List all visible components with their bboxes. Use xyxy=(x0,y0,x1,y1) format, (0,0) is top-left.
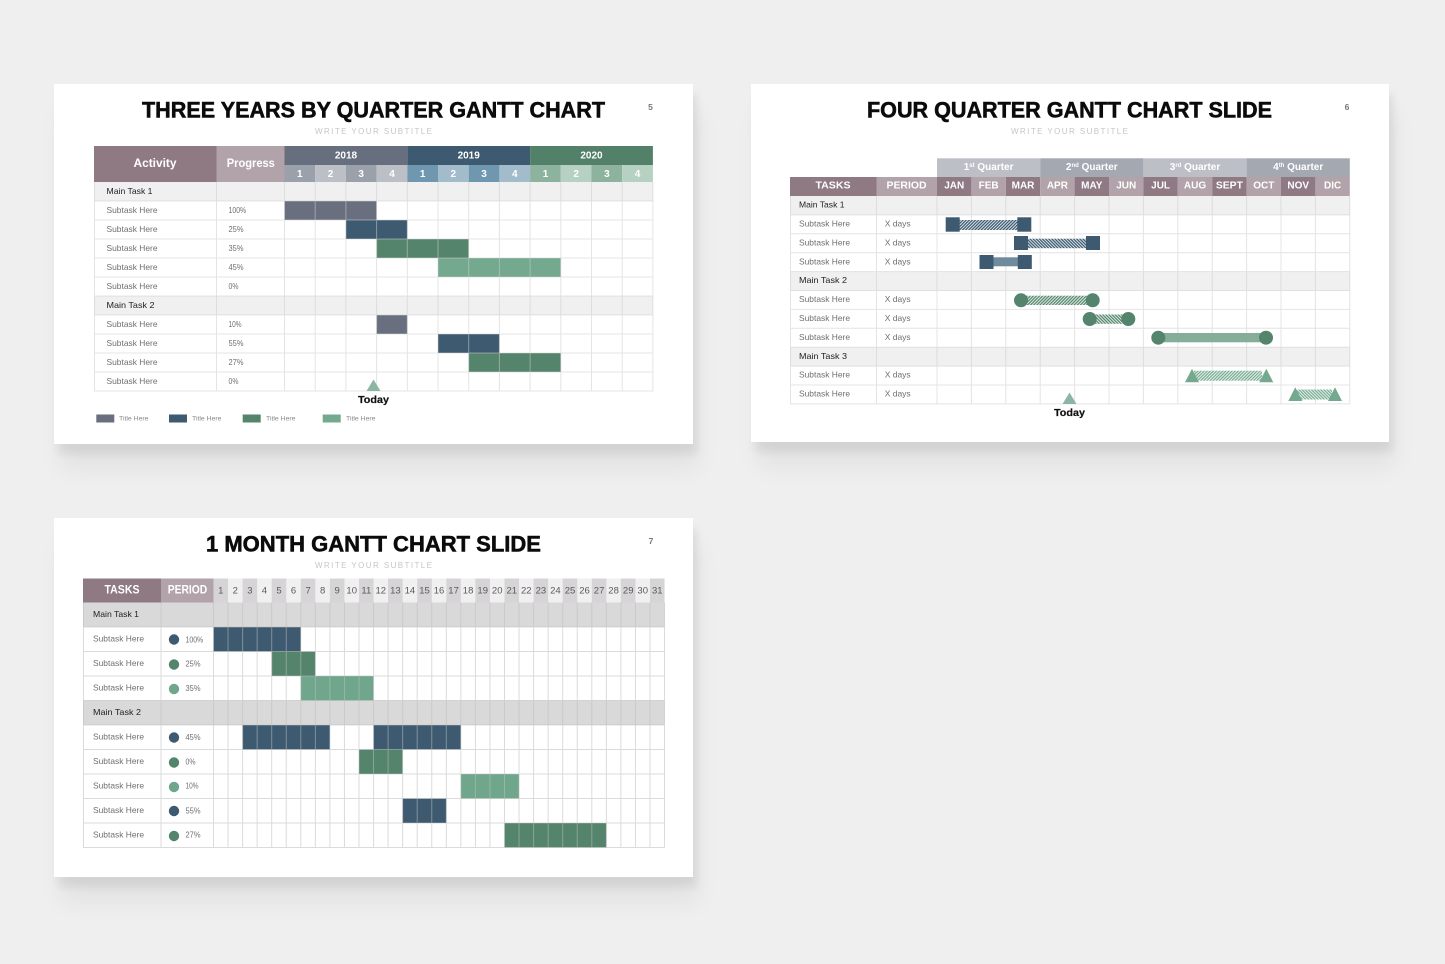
subtitle: WRITE YOUR SUBTITLE xyxy=(1011,127,1128,136)
table header: 3 xyxy=(247,585,253,596)
table header: nd xyxy=(1071,163,1079,169)
panel: three years by quarter gantt chart xyxy=(54,84,693,444)
task labels: Main Task 1 xyxy=(799,200,845,210)
table header: 14 xyxy=(405,585,415,596)
table header: 2 xyxy=(233,585,238,596)
progress values: 35% xyxy=(228,243,244,253)
task labels: Subtask Here xyxy=(106,205,158,215)
page number: 5 xyxy=(648,102,653,112)
task labels: Subtask Here xyxy=(799,313,850,323)
table header: MAY xyxy=(1081,181,1103,192)
task labels: Subtask Here xyxy=(799,294,850,304)
triangle marker bars xyxy=(1185,369,1342,401)
period status dots and percentages: 10% xyxy=(186,780,199,790)
circle marker bars xyxy=(1014,293,1273,345)
table header: PERIOD xyxy=(168,585,207,597)
task labels: Subtask Here xyxy=(106,243,158,253)
table header: rd xyxy=(1175,163,1182,169)
table header: DIC xyxy=(1324,181,1341,192)
table header xyxy=(83,578,665,602)
today marker xyxy=(1054,392,1085,419)
table header: 9 xyxy=(335,585,340,596)
panel: four quarter gantt chart xyxy=(751,84,1389,442)
table header: 2020 xyxy=(580,150,603,162)
table header: 3 xyxy=(604,169,610,180)
table header: TASKS xyxy=(816,181,851,192)
table header: 23 xyxy=(536,585,546,596)
table header: Quarter xyxy=(1181,162,1220,173)
task labels: Subtask Here xyxy=(799,370,850,380)
period values: X days xyxy=(885,256,911,266)
table header: 4 xyxy=(262,585,267,596)
table header: TASKS xyxy=(104,585,140,597)
table header: 1 xyxy=(964,162,969,173)
table header: 4 xyxy=(635,169,641,180)
progress values: 100% xyxy=(228,205,247,215)
table header: AUG xyxy=(1184,181,1206,192)
gantt bars xyxy=(214,627,606,848)
table header: 2 xyxy=(328,169,334,180)
table header: 28 xyxy=(608,585,619,596)
period status dots and percentages: 0% xyxy=(186,756,196,766)
table header: Quarter xyxy=(1284,162,1323,173)
table header: JUL xyxy=(1151,181,1170,192)
table header: JUN xyxy=(1116,181,1136,192)
task labels: Main Task 1 xyxy=(93,609,139,619)
task labels xyxy=(106,186,158,386)
progress values xyxy=(228,205,247,386)
task labels: Subtask Here xyxy=(799,332,850,342)
table header: APR xyxy=(1047,181,1069,192)
table header: 20 xyxy=(492,585,502,596)
task labels: Main Task 2 xyxy=(799,275,847,285)
table header: PERIOD xyxy=(886,181,926,192)
gantt grid xyxy=(94,182,653,391)
table header: 3 xyxy=(481,169,487,180)
period values: X days xyxy=(885,237,911,247)
page number: 7 xyxy=(649,536,654,546)
period values: X days xyxy=(885,389,911,399)
period values: X days xyxy=(885,332,911,342)
task labels: Subtask Here xyxy=(93,658,144,668)
table header: 22 xyxy=(521,585,532,596)
table header: 10 xyxy=(346,585,357,596)
table header: 24 xyxy=(550,585,561,596)
title: THREE YEARS BY QUARTER GANTT CHART xyxy=(142,98,606,122)
table header: 29 xyxy=(623,585,633,596)
gantt bars xyxy=(284,201,561,372)
task labels: Subtask Here xyxy=(93,830,144,840)
period status dots and percentages: 55% xyxy=(186,806,201,816)
task labels: Subtask Here xyxy=(106,319,158,329)
table header: 13 xyxy=(390,585,401,596)
task labels: Subtask Here xyxy=(93,634,144,644)
period values xyxy=(885,218,911,399)
period values: X days xyxy=(885,219,911,229)
subtitle: WRITE YOUR SUBTITLE xyxy=(315,127,432,136)
table header: 6 xyxy=(291,585,296,596)
table header: Activity xyxy=(134,158,177,170)
period status dots and percentages xyxy=(169,634,204,841)
table header: 19 xyxy=(477,585,488,596)
legend: Title Here xyxy=(192,415,222,422)
legend: Title Here xyxy=(119,415,149,422)
table header: 27 xyxy=(594,585,604,596)
legend xyxy=(96,414,376,422)
task labels: Subtask Here xyxy=(799,237,850,247)
progress values: 25% xyxy=(228,224,244,234)
progress values: 0% xyxy=(228,281,239,291)
today marker xyxy=(358,380,389,406)
table header: 2 xyxy=(1066,162,1071,173)
period status dots and percentages: 35% xyxy=(186,683,201,693)
today marker: Today xyxy=(1054,407,1085,419)
table header: 2 xyxy=(573,169,579,180)
task labels xyxy=(93,609,144,840)
task labels: Main Task 3 xyxy=(799,351,847,361)
table header xyxy=(94,146,653,182)
table header: Quarter xyxy=(975,162,1014,173)
table header: 18 xyxy=(463,585,473,596)
table header: Progress xyxy=(227,158,275,170)
task labels: Subtask Here xyxy=(93,781,144,791)
table header: st xyxy=(969,163,975,169)
task labels: Subtask Here xyxy=(799,219,850,229)
task labels: Subtask Here xyxy=(106,376,158,386)
table header: 12 xyxy=(376,585,386,596)
table header: 21 xyxy=(507,585,517,596)
task labels: Subtask Here xyxy=(106,357,158,367)
period status dots and percentages: 25% xyxy=(186,658,201,668)
table header: 1 xyxy=(218,585,223,596)
table header: 16 xyxy=(434,585,444,596)
table header: 17 xyxy=(448,585,459,596)
gantt grid xyxy=(83,602,664,848)
table header: 26 xyxy=(579,585,590,596)
table header: SEPT xyxy=(1216,181,1243,192)
table header: 1 xyxy=(543,169,549,180)
task labels: Main Task 2 xyxy=(106,300,155,310)
table header xyxy=(790,158,1350,196)
today marker: Today xyxy=(358,394,389,406)
task labels: Subtask Here xyxy=(799,389,850,399)
table header: FEB xyxy=(979,181,999,192)
task labels: Subtask Here xyxy=(106,281,158,291)
table header: 25 xyxy=(565,585,575,596)
table header: 5 xyxy=(276,585,282,596)
task labels: Subtask Here xyxy=(106,224,158,234)
title: FOUR QUARTER GANTT CHART SLIDE xyxy=(867,98,1272,122)
period values: X days xyxy=(885,370,911,380)
page number: 6 xyxy=(1345,102,1350,112)
subtitle: WRITE YOUR SUBTITLE xyxy=(315,561,432,570)
task labels: Subtask Here xyxy=(93,756,144,766)
task labels: Subtask Here xyxy=(106,338,158,348)
progress values: 55% xyxy=(228,338,244,348)
table header: 31 xyxy=(652,585,663,596)
task labels: Subtask Here xyxy=(106,262,158,272)
table header: JAN xyxy=(944,181,964,192)
table header: 2018 xyxy=(335,150,358,162)
table header: 30 xyxy=(637,585,648,596)
task labels: Subtask Here xyxy=(93,805,144,815)
table header: NOV xyxy=(1287,181,1309,192)
period values: X days xyxy=(885,294,911,304)
table header: 15 xyxy=(419,585,430,596)
table header: 7 xyxy=(305,585,311,596)
table header: 1 xyxy=(297,169,303,180)
table header: 8 xyxy=(320,585,325,596)
table header: 11 xyxy=(361,585,371,596)
task labels: Main Task 1 xyxy=(106,186,153,196)
legend: Title Here xyxy=(266,415,296,422)
task labels: Subtask Here xyxy=(93,732,144,742)
task labels: Main Task 2 xyxy=(93,707,141,717)
progress values: 0% xyxy=(228,376,239,386)
gantt grid xyxy=(790,196,1350,404)
progress values: 27% xyxy=(228,357,244,367)
task labels: Subtask Here xyxy=(799,256,850,266)
table header: MAR xyxy=(1012,181,1035,192)
period status dots and percentages: 100% xyxy=(186,634,204,644)
progress values: 45% xyxy=(228,262,244,272)
table header: 2 xyxy=(451,169,457,180)
table header: 3 xyxy=(1170,162,1175,173)
progress values: 10% xyxy=(228,319,242,329)
square marker bars xyxy=(946,217,1100,269)
table header: 4 xyxy=(389,169,395,180)
title: 1 MONTH GANTT CHART SLIDE xyxy=(206,532,541,556)
period values: X days xyxy=(885,313,911,323)
table header: OCT xyxy=(1253,181,1274,192)
table header: 2019 xyxy=(458,150,480,162)
table header: th xyxy=(1279,163,1285,169)
legend: Title Here xyxy=(346,415,376,422)
task labels: Subtask Here xyxy=(93,683,144,693)
table header: 1 xyxy=(420,169,426,180)
period status dots and percentages: 27% xyxy=(186,830,201,840)
table header: 4 xyxy=(512,169,518,180)
panel: one month gantt chart xyxy=(54,518,693,877)
table header: Quarter xyxy=(1079,162,1118,173)
task labels xyxy=(799,200,850,399)
period status dots and percentages: 45% xyxy=(186,732,201,742)
table header: 4 xyxy=(1273,162,1279,173)
table header: 3 xyxy=(358,169,364,180)
